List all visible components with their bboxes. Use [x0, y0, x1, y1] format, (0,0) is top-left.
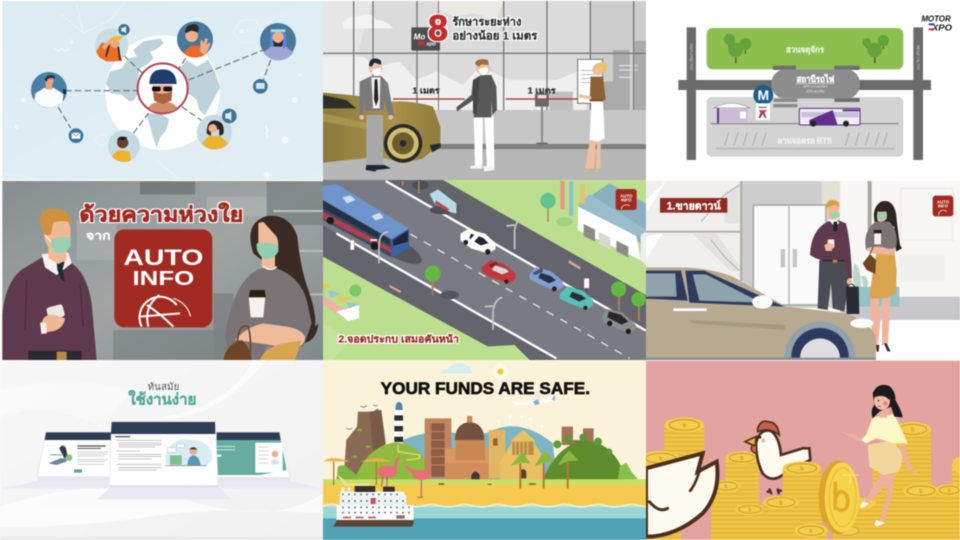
palm trees [511, 451, 579, 488]
coin stack front right: b [919, 489, 923, 495]
panel: couple and beige car [645, 180, 960, 361]
sun [493, 364, 508, 379]
coin stack lower middle left [735, 504, 765, 540]
trees at top [402, 180, 429, 194]
coin stack near foot [849, 498, 876, 540]
man with shopping bag [810, 200, 859, 314]
street light middle [506, 218, 524, 249]
icon: BTS logo [756, 103, 770, 120]
coin stack lower middle [763, 496, 799, 540]
kiosk on post [535, 93, 549, 144]
woman with coffee and bag [863, 201, 902, 352]
coin stack lower middle: b [779, 501, 783, 507]
beach strip [323, 479, 646, 486]
lighthouse [394, 402, 403, 443]
heading text [452, 15, 538, 43]
coin stack front right [903, 484, 939, 540]
road labels: ถนน เทียมร่วมมิตร [688, 43, 693, 70]
coin stack far right edge [952, 457, 960, 488]
heading text: รักษาระยะห่าง [452, 15, 521, 28]
icon: sound right [222, 109, 237, 123]
coin stack right edge [936, 484, 960, 540]
station [771, 66, 860, 102]
panel: station map [678, 14, 953, 161]
tree near building [540, 193, 573, 226]
icon: metro M: M [757, 87, 769, 103]
logo: motor expo badge: xpo [425, 41, 437, 47]
red Auto Info logo [114, 229, 212, 327]
cruise ship [333, 486, 414, 527]
panel: your funds are safe [322, 360, 647, 540]
brick tower [425, 418, 451, 478]
distance labels: 1 เมตร [528, 85, 556, 95]
logo: Auto Info small [616, 189, 637, 210]
coin stack back left [664, 417, 704, 462]
station: MRT สวนจตุจักร [803, 85, 828, 90]
coin stack back right [894, 422, 931, 496]
logo: Auto Info small [933, 196, 953, 216]
distant city buildings [550, 41, 646, 110]
right laptop [217, 432, 322, 488]
background blue hills [403, 426, 556, 480]
heading text: อย่างน้อย 1 เมตร [452, 30, 538, 43]
red Auto Info logo: AUTO [123, 245, 203, 270]
caption badge: 1.ขายดาวน์ [667, 199, 721, 212]
coin stack lower middle left: b [748, 507, 752, 513]
coin stack front of hen: b [800, 467, 804, 473]
heading: YOUR FUNDS ARE SAFE. [381, 379, 590, 398]
coin stack right edge: b [948, 488, 952, 494]
sign near bus [350, 240, 377, 250]
stepped seating [323, 283, 361, 321]
building facade with door [743, 181, 840, 308]
flamingos [377, 457, 430, 497]
logo: motor expo badge: Mo [414, 32, 425, 41]
red car [482, 260, 515, 284]
panel: showroom distancing one metre [322, 0, 647, 180]
coin stack beside hen: b [740, 456, 744, 462]
heading: ใช้งานง่าย [128, 389, 196, 408]
person: woman in orange with yellow cap [95, 28, 128, 62]
logo: Auto Info small: AUTO [620, 193, 633, 198]
bench right [568, 260, 581, 269]
coin stack bottom centre [794, 524, 828, 540]
green hills left [355, 442, 430, 480]
panel: three laptops [0, 360, 323, 540]
logo: Motor Expo: XPO [931, 23, 953, 32]
trees on right [611, 281, 646, 321]
panel: global network of people around a hacker [2, 0, 324, 180]
wind turbines [496, 416, 545, 433]
icon: chat [253, 79, 268, 94]
road labels: ถนน วิภาวดีรังสิต [915, 45, 920, 70]
teal car [560, 286, 593, 310]
coin stack beside hen [725, 451, 759, 506]
hacker in centre circle [138, 63, 188, 113]
logo: Motor Expo: MOTOR [921, 14, 951, 24]
street light left [379, 232, 388, 263]
big red number 8: 8 [428, 8, 448, 49]
bus stop [714, 103, 750, 123]
coin stack back left: b [682, 423, 686, 429]
rock cliff [344, 405, 386, 477]
caption badge [660, 198, 727, 213]
person: waving man in orange [177, 21, 213, 58]
woman sitting on coins [840, 385, 918, 527]
logo: Motor Expo [921, 14, 953, 32]
caption: 2.จอดประกบ เสมอคันหน้า [338, 334, 459, 346]
logo: Auto Info small: INFO [938, 204, 949, 209]
coin stack bottom centre: b [809, 529, 813, 535]
street light lower [485, 297, 502, 330]
woman with mask and coffee [223, 216, 318, 360]
icon: sound top [118, 24, 130, 35]
panel: coins, hen and woman [645, 360, 960, 540]
lane dashes [410, 234, 630, 358]
purple bus [799, 108, 860, 127]
coin stack lower left [711, 480, 741, 540]
hen foreground wing [646, 453, 717, 537]
park: สวนจตุจักร [786, 44, 824, 55]
icon: metro M [753, 85, 773, 105]
road labels [688, 43, 920, 70]
coin stack below big coin [833, 526, 859, 540]
heading [128, 382, 196, 408]
coin stack front of hen [783, 461, 821, 527]
person: man with blue headscarf [260, 23, 296, 60]
coin stack lower left: b [724, 484, 728, 490]
exit signs [773, 99, 797, 107]
icon: mail [69, 128, 83, 143]
big gold coin [819, 461, 859, 534]
logo: Auto Info small: AUTO [937, 199, 950, 204]
logo: Auto Info small: INFO [621, 198, 632, 203]
bench [389, 285, 401, 293]
domed cathedral [445, 416, 493, 480]
hen [745, 421, 810, 494]
sand [323, 483, 646, 507]
beach umbrellas [323, 458, 391, 486]
park [707, 28, 903, 69]
cloud [440, 363, 472, 373]
person: man with yellow shirt [108, 130, 140, 162]
blue car [530, 267, 563, 291]
coin stack far left: b [659, 457, 663, 463]
airplane [511, 382, 555, 405]
coin stack far left [641, 451, 681, 540]
dashed connection lines [58, 50, 271, 133]
coin stack centre-right behind woman [873, 467, 909, 540]
globe [105, 35, 220, 150]
left laptop [3, 432, 112, 488]
parking lot: ลานจอดรถ BTS [778, 135, 832, 145]
white road edges [336, 181, 646, 358]
castle and green hill right [543, 427, 638, 479]
tree on left median [425, 266, 459, 299]
man in grey suit [359, 59, 394, 172]
panel: with care from Auto Info [2, 180, 324, 361]
station: BTS หมอชิต [806, 90, 824, 94]
gold sports car [323, 93, 441, 163]
person: woman in yellow patterned top [197, 115, 232, 150]
beige car [646, 267, 876, 392]
woman with document board [578, 59, 608, 172]
white car [460, 229, 496, 255]
yellow tower and basilica [489, 430, 545, 479]
red distance lines [393, 98, 578, 100]
title in red with white outline: ด้วยความห่วงใย [79, 202, 243, 226]
road surface [323, 180, 646, 360]
blue bus [323, 184, 426, 270]
heading: ทันสมัย [148, 382, 179, 393]
station: สถานีรถไฟ [797, 73, 835, 84]
word: from: จาก [86, 230, 111, 242]
potted plant [849, 263, 899, 307]
panel: isometric road with cars [322, 179, 647, 361]
sign right [584, 278, 589, 292]
parking lot [707, 97, 903, 157]
distance labels: 1 เมตร [412, 85, 440, 95]
centre laptop [97, 422, 232, 499]
man with mask holding phone [2, 208, 97, 360]
distance labels [412, 85, 556, 95]
roads [678, 27, 931, 160]
grey SUV [602, 309, 636, 334]
person: man in white sweater [31, 72, 67, 108]
bus shelter [430, 189, 459, 218]
sea [323, 504, 656, 540]
logo: motor expo badge [411, 27, 440, 51]
man in dark sweater [456, 59, 497, 171]
building with grey roof [578, 183, 646, 265]
coin stack back right: b [911, 428, 915, 434]
flags [560, 181, 585, 216]
red Auto Info logo: INFO [132, 267, 194, 290]
